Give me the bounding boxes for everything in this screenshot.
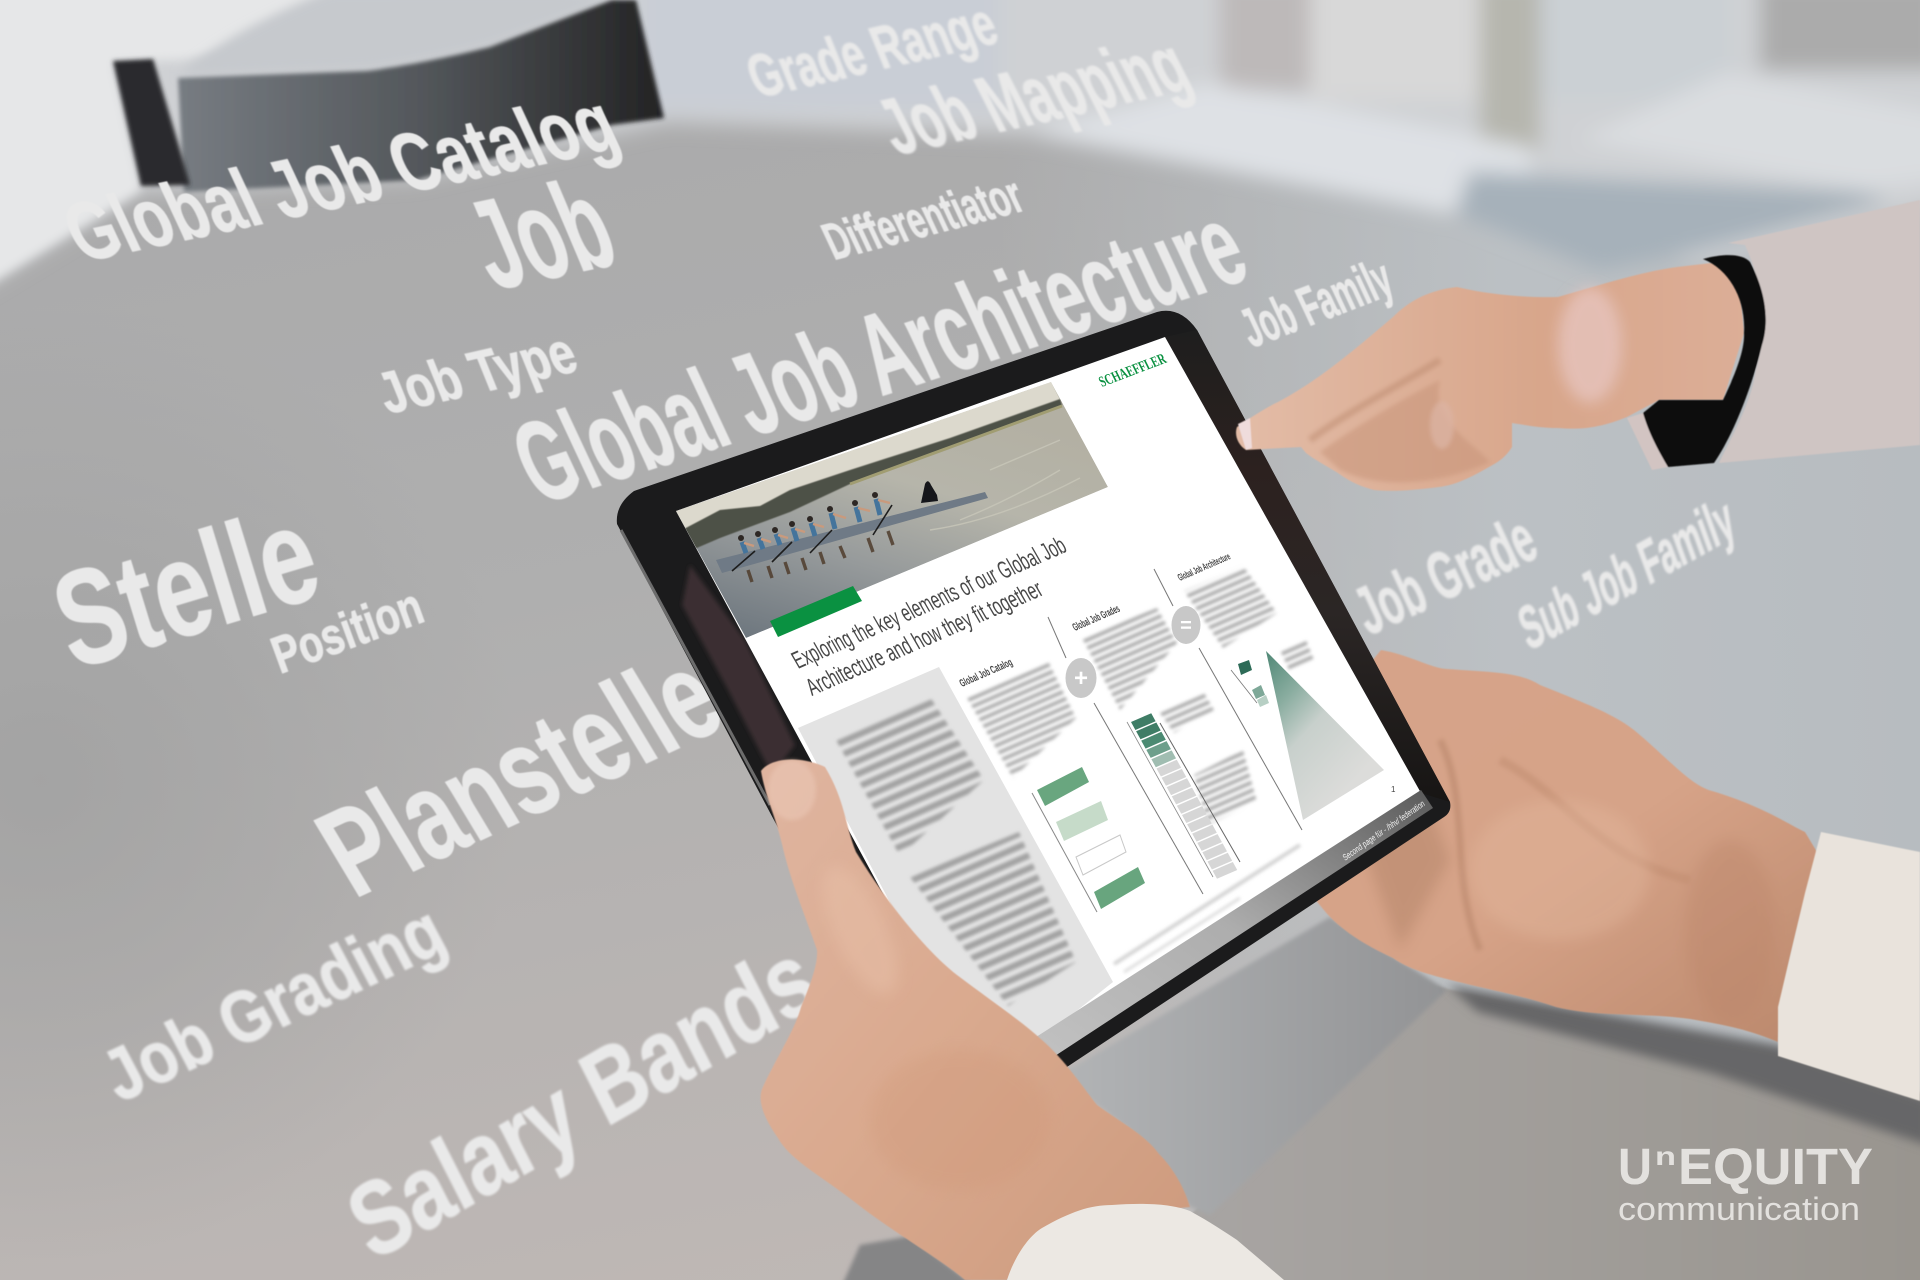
logo letter U: U bbox=[1618, 1138, 1652, 1195]
finger crease shading bbox=[1310, 360, 1440, 440]
title line 2: Architecture and how they fit together bbox=[801, 575, 1048, 701]
coxswain bbox=[921, 481, 938, 503]
tree line bbox=[682, 399, 1062, 550]
keyword: Job Grading: Job Grading bbox=[89, 889, 458, 1117]
tablet bbox=[617, 311, 1450, 1118]
boat bbox=[716, 492, 988, 573]
plus circle: + bbox=[1074, 665, 1088, 692]
gray side panel bbox=[798, 667, 1113, 1073]
chair seat bbox=[178, 0, 612, 76]
page number: 1 bbox=[1391, 785, 1396, 794]
UnEQUITY communication logo bbox=[1618, 1138, 1873, 1227]
page title bbox=[787, 532, 1071, 701]
pale sky bbox=[676, 382, 1060, 535]
back of hand shade bbox=[870, 1050, 1050, 1190]
reflections bbox=[748, 531, 893, 582]
keyword: Salary Bands: Salary Bands bbox=[331, 919, 834, 1280]
bottom gray strip bbox=[980, 790, 1433, 1092]
table shadows lower right bbox=[840, 917, 1920, 1280]
hand shadow band bbox=[1447, 985, 1920, 1146]
rowing photo bbox=[676, 382, 1108, 638]
architecture pyramid bbox=[1266, 651, 1384, 820]
wrist shade bbox=[1685, 840, 1775, 1020]
keyword: Global Job Architecture: Global Job Architecture bbox=[494, 181, 1265, 529]
chair bbox=[113, 0, 664, 192]
plus circle bbox=[1066, 658, 1096, 698]
job catalog flow boxes bbox=[1032, 767, 1145, 912]
equals circle: = bbox=[1180, 615, 1192, 637]
sleeve bbox=[1719, 200, 1920, 463]
keyword: Position: Position bbox=[264, 577, 431, 685]
architecture legend squares bbox=[1231, 660, 1269, 707]
keyword: Differentiator: Differentiator bbox=[814, 166, 1033, 271]
page background bbox=[676, 337, 1421, 1073]
rowers bbox=[738, 481, 938, 553]
chair back bbox=[178, 0, 664, 192]
oars bbox=[732, 505, 892, 571]
far shore bbox=[850, 406, 1062, 484]
bezel reflection left bbox=[682, 565, 795, 775]
palm crease bbox=[1500, 760, 1690, 880]
keyword: Job Grade: Job Grade bbox=[1343, 500, 1547, 650]
water ripples bbox=[930, 440, 1080, 530]
right hand holding tablet bbox=[1250, 650, 1817, 1042]
column dividers bbox=[1048, 569, 1302, 894]
keyword: Job: Job bbox=[447, 152, 634, 316]
bezel reflection right bbox=[1165, 330, 1450, 802]
keyword: Planstelle: Planstelle bbox=[295, 626, 745, 923]
thumb nail bbox=[768, 760, 816, 820]
warm table zone bbox=[1190, 985, 1920, 1280]
tablet screen bbox=[676, 337, 1433, 1092]
chair post bbox=[113, 59, 190, 186]
job grades bar stack bbox=[1127, 713, 1240, 879]
footer text: Second page für - /hhv/ federation bbox=[1341, 798, 1426, 863]
logo word communication: communication bbox=[1618, 1191, 1860, 1227]
finger nail bbox=[1238, 418, 1252, 450]
palm highlight bbox=[1470, 800, 1650, 940]
keyword: Job Type: Job Type bbox=[368, 320, 586, 426]
blurred body copy bbox=[835, 566, 1314, 1006]
finger shade bbox=[1360, 780, 1450, 950]
black lining bbox=[1643, 255, 1766, 467]
section heading: Global Job Architecture: Global Job Architecture bbox=[1176, 552, 1233, 584]
section heading: Global Job Catalog: Global Job Catalog bbox=[957, 657, 1015, 690]
logo superscript n: n bbox=[1655, 1141, 1676, 1171]
white cloth at upper left bbox=[0, 0, 460, 290]
lower fingers shade bbox=[1320, 380, 1490, 482]
left hand shadow bbox=[840, 1236, 980, 1280]
thumb highlight bbox=[807, 856, 913, 1004]
knuckle highlight bbox=[1558, 287, 1622, 403]
right shirt cuff bbox=[1778, 832, 1920, 1101]
title line 1: Exploring the key elements of our Global Job bbox=[787, 532, 1071, 674]
section heading: Global Job Grades: Global Job Grades bbox=[1070, 603, 1122, 634]
palm crease bbox=[1440, 740, 1480, 950]
tablet shadow bbox=[1060, 917, 1447, 1215]
keyword: Job Family: Job Family bbox=[1230, 246, 1402, 359]
blurred room background bbox=[0, 0, 1920, 300]
pointing hand bbox=[1236, 260, 1744, 491]
equals circle bbox=[1172, 606, 1200, 644]
SCHAEFFLER logo: SCHAEFFLER bbox=[1096, 350, 1170, 391]
thumb highlight bbox=[1430, 401, 1454, 449]
left shirt cuff bbox=[1007, 1204, 1284, 1280]
tablet body bbox=[617, 311, 1450, 1118]
keyword: Stelle: Stelle bbox=[37, 477, 334, 698]
sleeve flange bbox=[1627, 413, 1668, 470]
pointing arm cuff bbox=[1627, 200, 1920, 470]
keyword: Global Job Catalog: Global Job Catalog bbox=[49, 77, 632, 279]
green accent bar bbox=[770, 586, 862, 637]
keyword: Sub Job Family: Sub Job Family bbox=[1511, 484, 1743, 663]
tablet silver edge bbox=[621, 530, 770, 805]
left hand holding tablet bbox=[761, 759, 1190, 1280]
logo word EQUITY: EQUITY bbox=[1678, 1138, 1873, 1195]
